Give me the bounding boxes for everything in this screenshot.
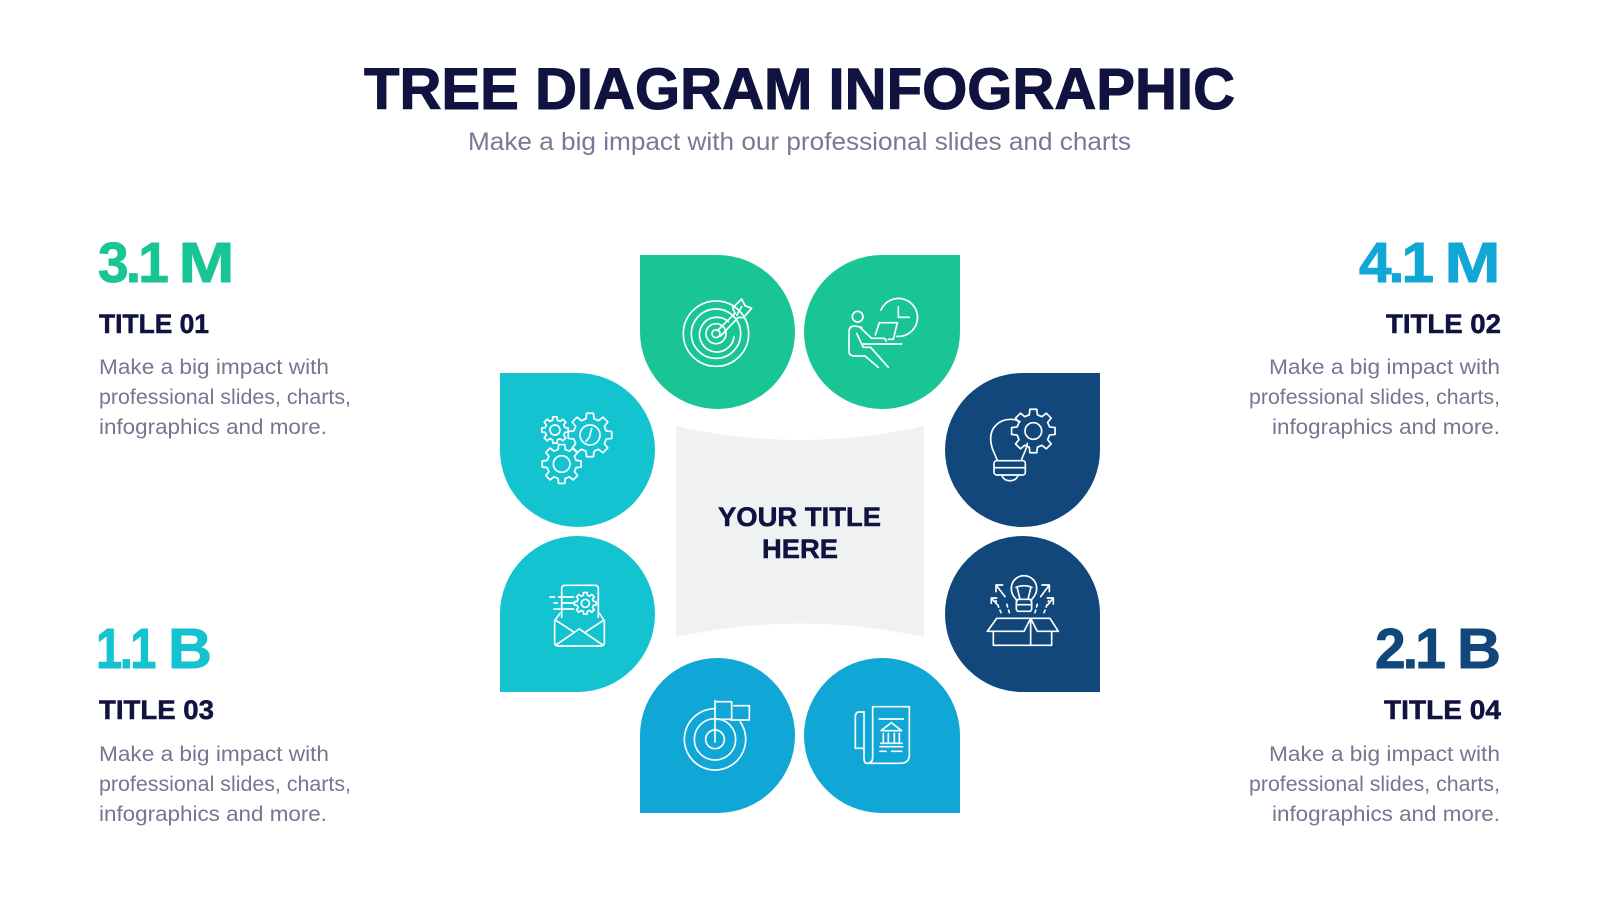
stat value 2.1 B: 2.1 — [1375, 617, 1445, 681]
stat value 1.1 B: 1.1 — [96, 617, 156, 681]
stat value 3.1 M — [98, 231, 234, 295]
icon: idea box — [987, 576, 1058, 645]
text block: description 03 — [99, 743, 351, 826]
drop: green target — [640, 255, 795, 409]
panel: stat 03 — [96, 617, 351, 826]
text block: description 03: infographics and more. — [99, 803, 327, 826]
text block: description 03: Make a big impact with — [99, 743, 329, 766]
stat value 1.1 B — [96, 617, 212, 681]
text block: description 04: infographics and more. — [1272, 803, 1500, 826]
text block: description 01: professional slides, charts, — [99, 386, 351, 409]
text block: description 04: Make a big impact with — [1269, 743, 1500, 766]
heading: title 02: TITLE 02 — [1386, 309, 1501, 339]
drop: teal envelope — [500, 536, 655, 692]
text block: description 01: infographics and more. — [99, 416, 327, 439]
center heading: HERE — [762, 534, 838, 564]
drop: blue flag target — [640, 658, 795, 813]
text block: description 04: professional slides, charts, — [1249, 773, 1500, 796]
icon: light bulb with gear — [991, 409, 1055, 481]
text block: description 02: Make a big impact with — [1269, 356, 1500, 379]
panel: stat 01 — [98, 231, 351, 439]
panel: stat 04 — [1249, 617, 1501, 826]
stat value 4.1 M: 4.1 — [1359, 231, 1433, 295]
text block: description 02: professional slides, charts, — [1249, 386, 1500, 409]
stat value 3.1 M: 3.1 — [98, 231, 168, 295]
icon: person at laptop with clock — [849, 298, 917, 367]
stat value 1.1 B: B — [168, 617, 212, 681]
center heading — [718, 502, 881, 564]
center shape — [676, 426, 924, 637]
stat value 3.1 M: M — [178, 231, 234, 295]
heading: title 01: TITLE 01 — [99, 309, 209, 339]
icon: gears — [542, 413, 612, 483]
drop: blue document — [804, 658, 960, 813]
text block: description 03: professional slides, charts, — [99, 773, 351, 796]
stat value 2.1 B: B — [1457, 617, 1501, 681]
text block: description 02 — [1249, 356, 1500, 439]
stat value 2.1 B — [1375, 617, 1501, 681]
drop: green person — [804, 255, 960, 409]
icon: target with flag — [684, 701, 749, 770]
drop: navy bulb gear — [945, 373, 1100, 527]
subtitle: Make a big impact with our professional slides and charts — [468, 128, 1131, 156]
icon: target with arrow — [683, 299, 752, 366]
drop: teal gears — [500, 373, 655, 527]
icon: bank document — [855, 707, 909, 763]
text block: description 01 — [99, 356, 351, 439]
stat value 4.1 M — [1359, 231, 1500, 295]
heading: title 03: TITLE 03 — [99, 695, 214, 725]
title: TREE DIAGRAM INFOGRAPHIC — [364, 57, 1235, 122]
panel: center title — [676, 426, 924, 637]
text block: description 01: Make a big impact with — [99, 356, 329, 379]
text block: description 04 — [1249, 743, 1500, 826]
icon: envelope with gear — [550, 585, 604, 646]
drop: navy box — [945, 536, 1100, 692]
panel: stat 02 — [1249, 231, 1501, 439]
heading: title 04: TITLE 04 — [1384, 695, 1501, 725]
center heading: YOUR TITLE — [718, 502, 881, 532]
stat value 4.1 M: M — [1444, 231, 1500, 295]
text block: description 02: infographics and more. — [1272, 416, 1500, 439]
